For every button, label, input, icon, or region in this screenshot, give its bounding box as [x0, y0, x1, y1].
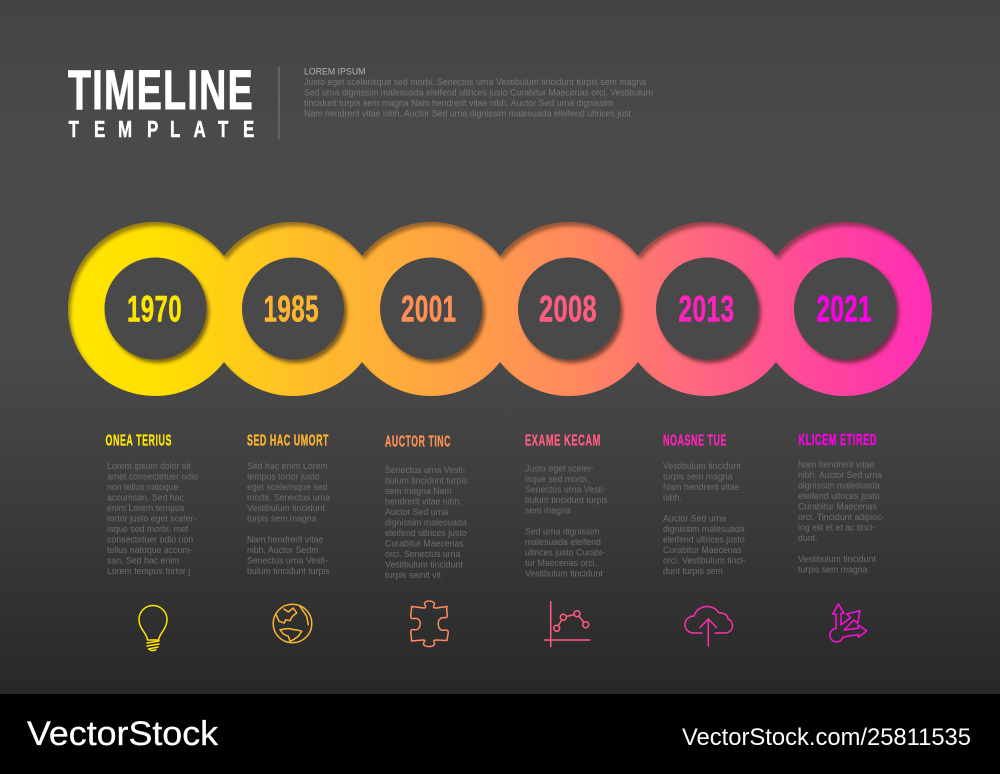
title: TIMELINE [68, 58, 254, 121]
icon: light bulb [139, 606, 167, 651]
column 2: tempus tortor justo [247, 472, 320, 482]
column 6: Vestibulum tincidunt [798, 554, 876, 564]
column 6: nibh. Auctor Sed urna [798, 470, 882, 480]
year 2001 [380, 258, 482, 360]
column 4: Justo eget sceler- [525, 464, 594, 474]
column 1 [106, 432, 198, 576]
intro text block: Sed urna dignissim malesuada eleifend ultrices justo Curabitur Maecenas orci. Vestibulum [304, 88, 653, 98]
column 3: Auctor Sed urna [385, 507, 448, 517]
column 3: dignissim malesuada [385, 518, 467, 528]
year 2013: 2013 [678, 288, 734, 330]
column 5: eleifend ultrices justo [663, 534, 745, 544]
column 6: orci. Tincidunt adipisc- [798, 512, 885, 522]
year 2008 [518, 258, 620, 360]
column 1: isque sed morbi. met [107, 524, 189, 534]
column 1: tellus natoque accum- [107, 545, 193, 555]
column 3: Curabitur Maecenas [385, 538, 464, 548]
watermark banner [0, 694, 1000, 774]
column 4: EXAME KECAM [525, 432, 601, 450]
column 6: turpis sem magna [798, 564, 868, 574]
column 4: Sed urna dignissim [525, 526, 599, 536]
column 2: bulum tincidunt turpis [247, 566, 330, 576]
column 5: nibh. [663, 492, 682, 502]
year 1970: 1970 [127, 288, 182, 330]
column 1: san. Sed hac enim [107, 556, 179, 566]
column 1: accumsan. Sed hac [107, 492, 184, 502]
year 1985: 1985 [264, 288, 319, 330]
column 3: eleifend ultrices justo [385, 528, 467, 538]
title: TEMPLATE [69, 116, 254, 143]
column 3: bulum tincidunt turpis [385, 476, 468, 486]
column 2: morbi. Senectus urna [247, 492, 330, 502]
column 2: Vestibulum tincidunt [247, 503, 325, 513]
column 6: dignissim malesuada [798, 480, 880, 490]
column 4: Vestibulum tincidunt [525, 568, 603, 578]
column 3: turpis semit vit [385, 570, 441, 580]
column 2: Sed hac enim Lorem [247, 461, 328, 471]
column 2: nibh. Auctor Sedm [247, 545, 318, 555]
column 6 [798, 432, 885, 574]
watermark logo: VectorStock [27, 715, 219, 753]
column 2 [247, 432, 330, 576]
year 1970 [104, 258, 206, 360]
icon: puzzle piece [411, 601, 448, 647]
icon: line chart [544, 602, 590, 646]
year 1985 [242, 258, 344, 360]
title [68, 58, 254, 143]
column 1: Lorem ipsum dolor sit [107, 461, 191, 471]
column 5: Auctor Sed urna [663, 514, 726, 524]
column 5: Curabitur Maecenas [663, 545, 742, 555]
column 4: tur Maecenas orci. [525, 558, 597, 568]
timeline ring chain [68, 222, 932, 396]
year 2013 [656, 258, 758, 360]
column 4: bulum tincidunt turpis [525, 495, 608, 505]
year 2001: 2001 [401, 288, 456, 330]
column 5: Nam hendrerit vitae [663, 482, 739, 492]
intro text block: Justo eget scelerisque sed morbi. Senectus urna Vestibulum tincidunt turpis sem magna [304, 77, 646, 87]
column 6: ing elit et et ac tinci- [798, 522, 875, 532]
column 1: amet consectetuer odio [107, 472, 198, 482]
column 4: sem magna [525, 506, 571, 516]
icon: globe [273, 604, 312, 643]
column 4: Senectus urna Vesti- [525, 484, 606, 494]
column 3: hendrerit vitae nibh. [385, 496, 462, 506]
column 1: non tellus natoque [107, 482, 179, 492]
column 1: ONEA TERIUS [106, 432, 172, 450]
column 1: tortor justo eget sceler- [107, 514, 197, 524]
column 5: turpis sem magna [663, 472, 733, 482]
column 5: orci. Vestibulum tinci- [663, 556, 746, 566]
column 2: SED HAC UMORT [247, 432, 329, 450]
column 5: Vestibulum tincidunt [663, 461, 741, 471]
icon: branching arrows [830, 604, 867, 642]
column 5: dunt turpis sem [663, 566, 723, 576]
intro text block [304, 66, 653, 118]
year 2021: 2021 [816, 288, 872, 330]
column 3: Senectus urna Vesti- [385, 465, 466, 475]
column 3: sem magna Nam [385, 486, 452, 496]
column 6: dunt. [798, 533, 817, 543]
column 4: ultrices justo Curabi- [525, 548, 605, 558]
column 1: consectetuer odio non [107, 534, 193, 544]
intro text block: LOREM IPSUM [304, 66, 366, 76]
watermark url: VectorStock.com/25811535 [682, 724, 971, 751]
column 6: KLICEM ETIRED [798, 432, 877, 449]
column 3 [385, 434, 468, 580]
icon: cloud upload [685, 606, 732, 646]
column 3: Vestibulum tincidunt [385, 560, 463, 570]
column 6: Nam hendrerit vitae [798, 460, 874, 470]
column 4 [525, 432, 608, 578]
intro text block: tincidunt turpis sem magna Nam hendrerit vitae nibh. Auctor Sed urna dignissim [304, 98, 613, 108]
column 3: orci. Senectus urna [385, 549, 461, 559]
column 3: AUCTOR TINC [385, 434, 451, 450]
column 2: eget scelerisque sed [247, 482, 327, 492]
column 5 [663, 432, 746, 576]
intro text block: Nam hendrerit vitae nibh. Auctor Sed urna dignissim malesuada eleifend ultrices just [304, 108, 631, 118]
column 2: Senectus urna Vesti- [247, 556, 328, 566]
column 5: dignissim malesuada [663, 524, 745, 534]
column 6: Curabitur Maecenas [798, 502, 877, 512]
column 1: enim Lorem tempus [107, 503, 185, 513]
year 2008: 2008 [539, 288, 597, 330]
year 2021 [794, 258, 896, 360]
column 1: Lorem tempus tortor j [107, 566, 190, 576]
column 2: Nam hendrerit vitae [247, 534, 323, 544]
column 5: NOASNE TUE [663, 432, 727, 450]
column 4: malesuada eleifend [525, 537, 601, 547]
column 6: eleifend ultrices justo [798, 491, 880, 501]
column 4: isque sed morbi. [525, 474, 589, 484]
column 2: turpis sem magna [247, 514, 317, 524]
